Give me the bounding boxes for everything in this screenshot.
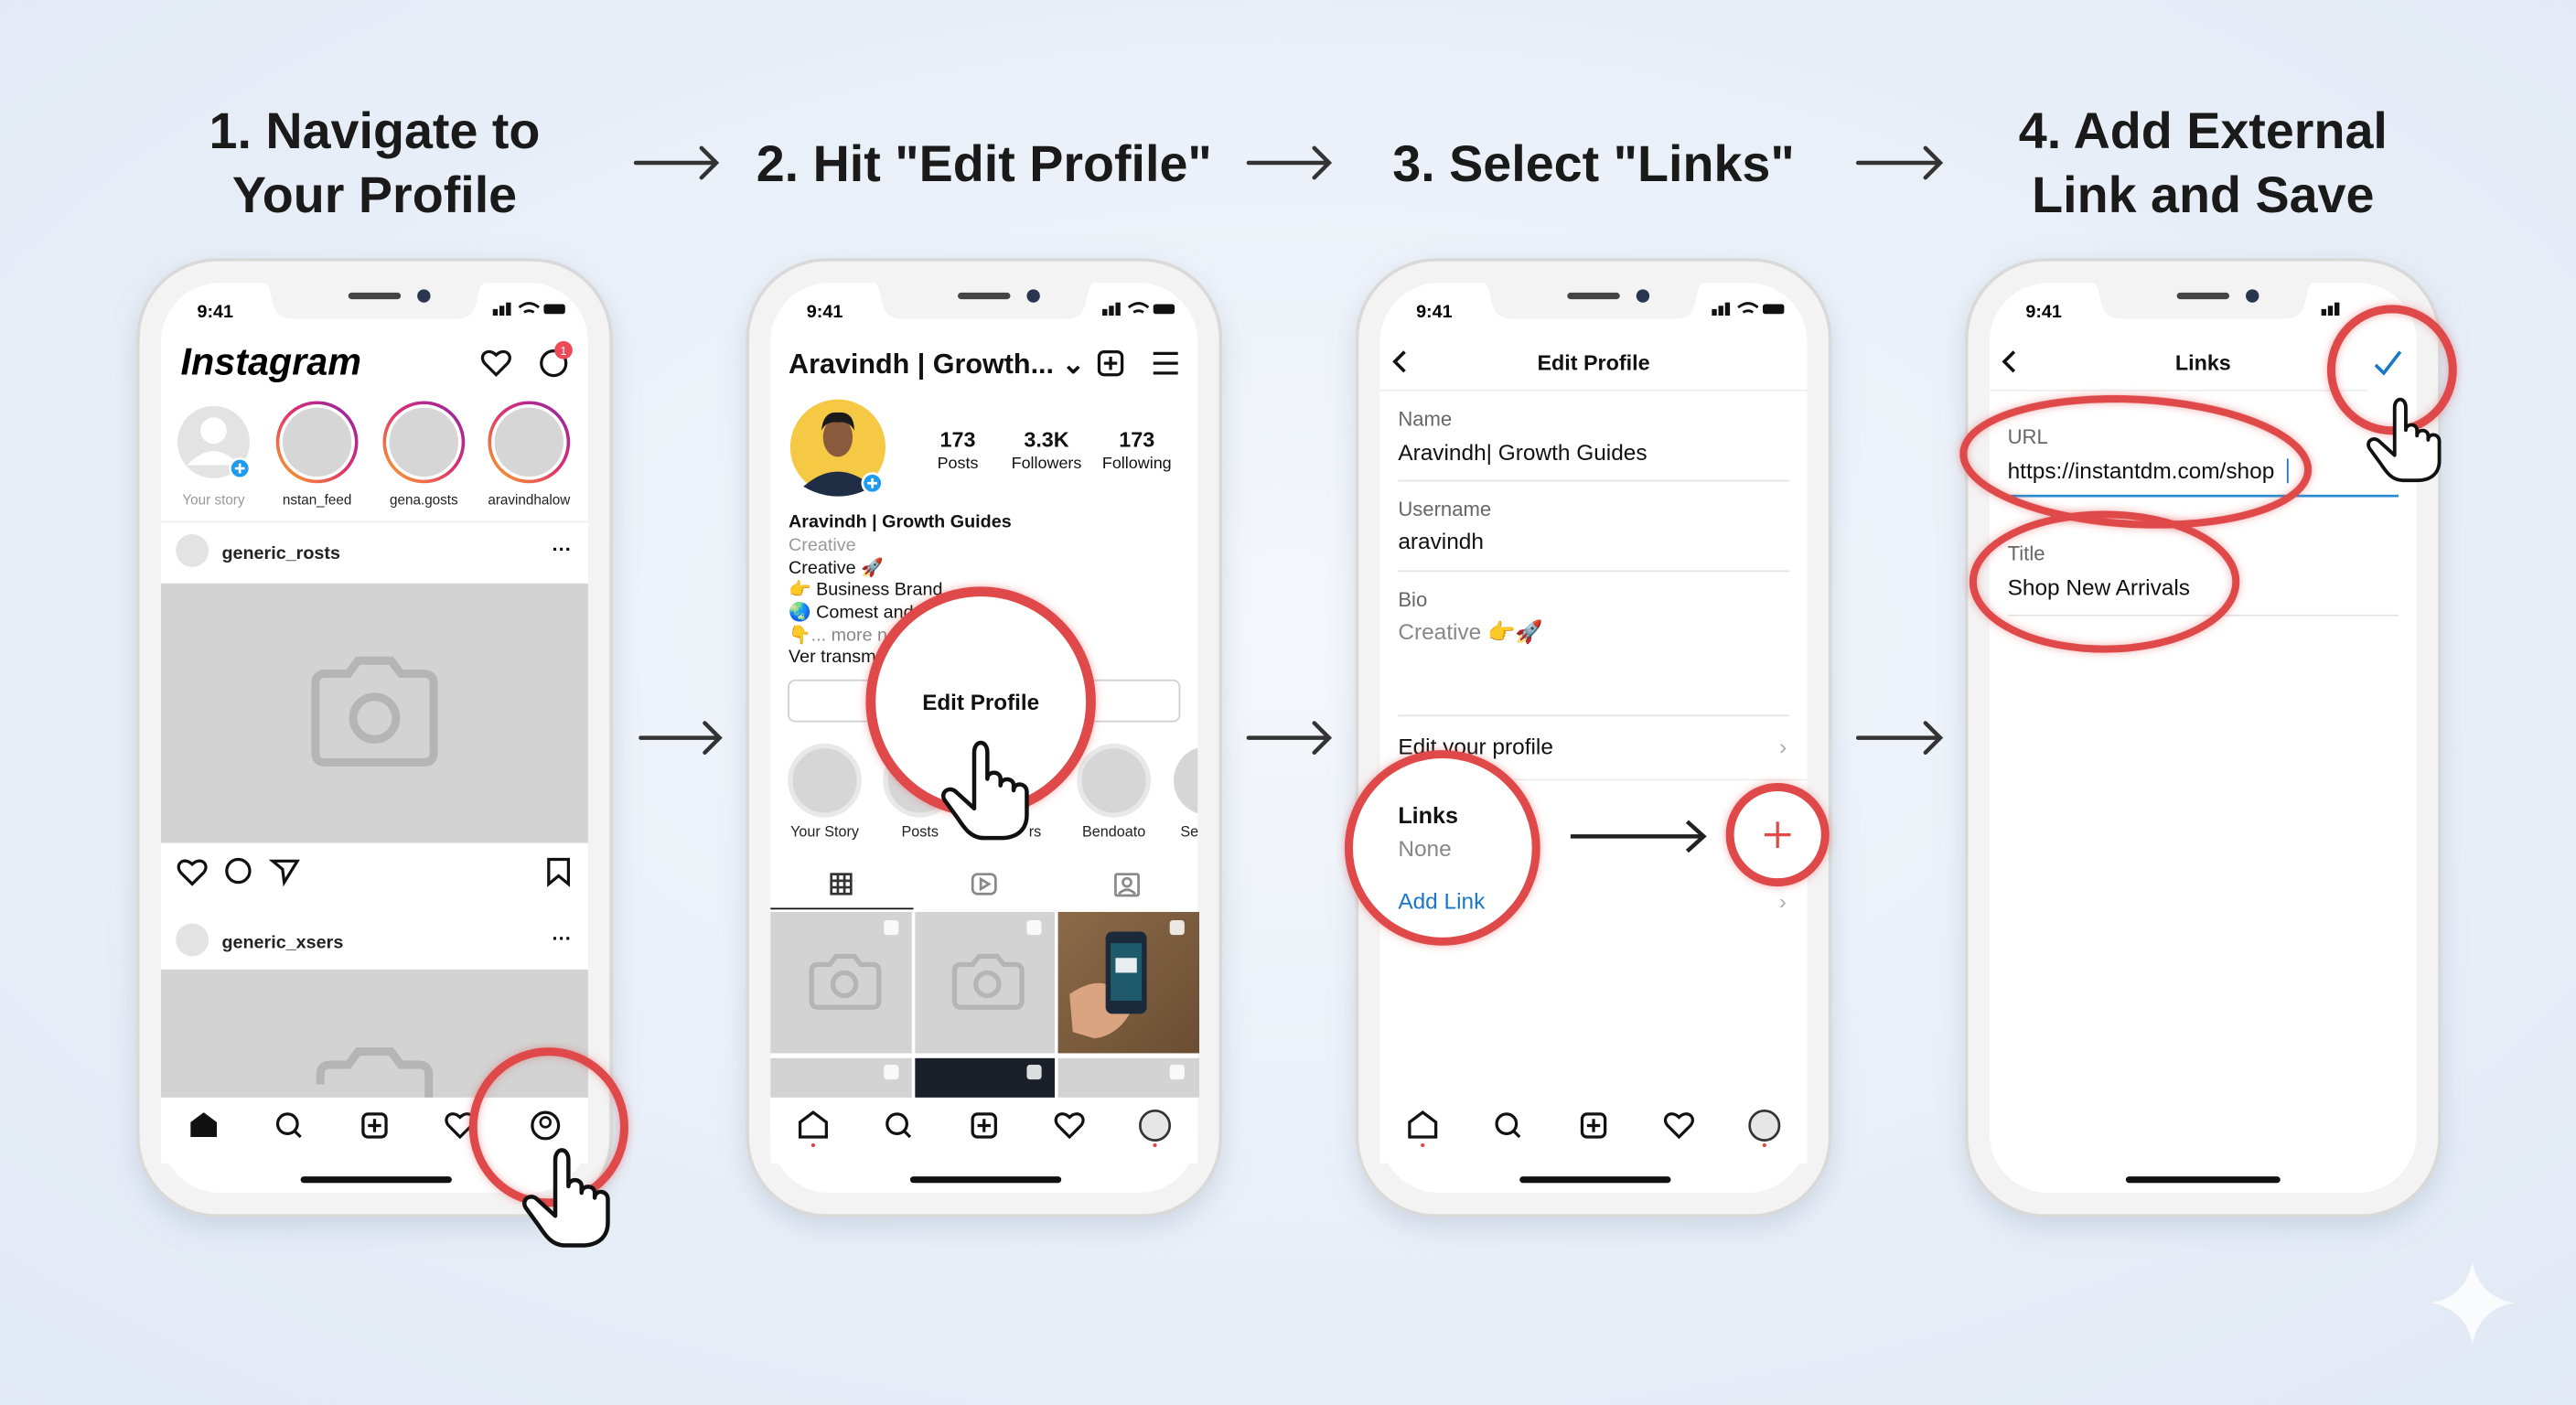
phone 1: instagram feed: [138, 260, 624, 1246]
instagram header: 1: [561, 345, 567, 358]
bottom nav: [1380, 1098, 1808, 1183]
links row: Add Link: [1398, 889, 1486, 914]
title: step 3: 3. Select "Links": [1392, 135, 1795, 192]
bio: Ver transm: [789, 647, 876, 667]
post 2 image: [161, 970, 588, 1098]
stats: Following: [1102, 454, 1172, 472]
bio: [789, 512, 1012, 667]
add button circle: [1730, 787, 1825, 883]
stats: Followers: [1012, 454, 1081, 472]
post 1 header: ···: [552, 537, 572, 560]
photo grid: [770, 912, 1199, 1098]
links row: [1348, 755, 1787, 941]
highlights: Posts: [902, 823, 939, 840]
highlight circle: profile icon: [473, 1052, 624, 1203]
icon: hand cursor: [2368, 400, 2440, 480]
title field: Title: [2008, 542, 2045, 565]
phone 4: links screen: [1960, 260, 2453, 1216]
save check with circle: [2331, 309, 2453, 431]
icon: hand cursor: [943, 743, 1026, 838]
url field: [2008, 425, 2399, 498]
title: step 2: 2. Hit "Edit Profile": [757, 135, 1212, 192]
bottom nav: [770, 1098, 1197, 1183]
stats: [938, 428, 1172, 472]
bio: 🌏 Comest and: [789, 602, 914, 623]
post 2 header: [176, 924, 572, 956]
arrow: middle 3-4: [1858, 723, 1940, 753]
instagram header: [181, 341, 573, 383]
highlights: rs: [1029, 823, 1041, 840]
arrow: to add button: [1571, 821, 1703, 852]
title: step 1: 1. Navigate to: [209, 102, 540, 159]
form fields: Bio: [1398, 588, 1427, 611]
stories row: [177, 402, 571, 509]
form fields: Aravindh| Growth Guides: [1398, 441, 1648, 466]
stats: 173: [1119, 428, 1154, 452]
arrow: middle 1-2: [640, 723, 720, 753]
header: [1380, 350, 1808, 391]
bio: Creative 🚀: [789, 557, 884, 578]
status bar: 9:41: [198, 302, 233, 322]
profile header: Aravindh | Growth... ⌄: [789, 349, 1085, 380]
url field: https://instantdm.com/shop: [2008, 459, 2274, 484]
decorative sparkle: [2431, 1262, 2514, 1344]
status bar: 9:41: [807, 302, 843, 322]
phone 2: profile: [747, 260, 1220, 1216]
form fields: aravindh: [1398, 530, 1484, 554]
post 1 header: generic_rosts: [221, 543, 340, 563]
title: step 1: Your Profile: [232, 166, 517, 223]
form fields: Username: [1398, 498, 1491, 520]
icon: hand cursor: [524, 1150, 607, 1246]
bottom nav: [161, 1098, 588, 1183]
highlights: Bendoato: [1082, 823, 1145, 840]
header: [1990, 350, 2367, 391]
bio: Aravindh | Growth Guides: [789, 512, 1012, 532]
title: step 4: 4. Add External: [2019, 102, 2388, 159]
links row: Links: [1398, 803, 1458, 829]
form fields: [1380, 407, 1808, 780]
title: step 1: [209, 102, 540, 223]
home indicator: [2126, 1176, 2281, 1183]
links row: None: [1398, 837, 1452, 862]
header: Edit Profile: [1537, 350, 1650, 374]
form fields: Creative 👉🚀: [1398, 618, 1543, 645]
edit profile button: [789, 681, 1179, 722]
title: step 4: Link and Save: [2032, 166, 2374, 223]
title field: [2008, 542, 2399, 617]
status bar: 9:41: [1416, 302, 1453, 322]
title field: Shop New Arrivals: [2008, 575, 2190, 600]
post 2 header: generic_xsers: [221, 932, 343, 952]
form fields: ›: [1779, 735, 1787, 760]
status bar: [807, 302, 1175, 322]
stats: Posts: [938, 454, 978, 472]
form fields: Edit your profile: [1398, 735, 1553, 760]
phone 3: edit profile screen: [1348, 260, 1830, 1216]
links row: ›: [1779, 889, 1787, 913]
form fields: Name: [1398, 407, 1452, 430]
post 1 header: [176, 534, 572, 567]
highlight ellipse: url: [1960, 391, 2312, 533]
bio: 👉 Business Brand: [789, 578, 942, 599]
bio: 👇... more n: [789, 625, 887, 646]
tabs: [770, 874, 1139, 908]
post 1 image: [161, 584, 588, 843]
highlight circle: edit profile: [871, 592, 1090, 811]
avatar: [790, 400, 886, 497]
stories row: gena.gosts: [390, 493, 458, 509]
status bar: 9:41: [2025, 302, 2062, 322]
arrow: middle 2-3: [1249, 723, 1329, 753]
stories row: Your story: [182, 493, 245, 509]
stats: 3.3K: [1024, 428, 1069, 452]
status bar: [198, 302, 565, 322]
highlights: Your Story: [790, 823, 860, 840]
arrow: top 2-3: [1249, 148, 1329, 177]
post actions: [178, 860, 568, 884]
status bar: [1416, 302, 1784, 322]
url field: URL: [2008, 425, 2048, 448]
highlights: Se: [1180, 823, 1198, 840]
post 2 header: ···: [552, 927, 572, 949]
stats: 173: [940, 428, 975, 452]
arrow: top 1-2: [636, 148, 716, 177]
status bar: [2025, 302, 2339, 322]
highlights: [790, 746, 1198, 840]
highlight circle: edit profile: Edit Profile: [922, 691, 1039, 715]
arrow: top 3-4: [1858, 148, 1940, 177]
header: Links: [2175, 350, 2231, 374]
bio: Creative: [789, 535, 856, 555]
title: step 4: [2019, 102, 2388, 223]
stories row: aravindhalow: [488, 493, 571, 509]
stories row: nstan_feed: [283, 493, 351, 509]
highlight ellipse: title: [1973, 514, 2236, 649]
instagram header: Instagram: [181, 341, 361, 383]
